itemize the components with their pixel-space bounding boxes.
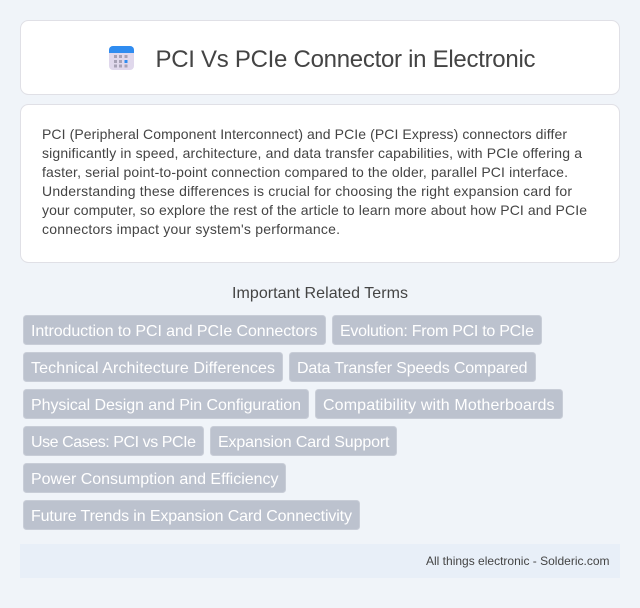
tag: speeds: Data Transfer Speeds Compared <box>297 360 528 377</box>
tag: compatibility: Compatibility with Motherboards <box>323 397 554 414</box>
tag: future trends: Future Trends in Expansion Card Connectivity <box>31 508 352 525</box>
tag: power <box>24 464 286 492</box>
footer credit: All things electronic - Solderic.com <box>426 554 610 568</box>
tag: expansion card: Expansion Card Support <box>218 434 390 451</box>
tag: speeds <box>290 352 536 382</box>
intro paragraph: PCI (Peripheral Component Interconnect) and PCIe (PCI Express) connectors differ <box>42 126 567 142</box>
tag: expansion card <box>210 426 396 456</box>
tag: architecture <box>24 352 282 382</box>
tag: introduction <box>24 316 326 344</box>
tag: future trends <box>24 500 360 530</box>
related terms tags <box>24 316 562 530</box>
tag: physical design: Physical Design and Pin Configuration <box>31 397 301 414</box>
tag: introduction: Introduction to PCI and PCIe Connectors <box>31 323 318 340</box>
icon: calendar grid <box>109 46 134 70</box>
header panel <box>20 20 620 94</box>
intro paragraph: significantly in speed, architecture, and data transfer capabilities, with PCIe offering a <box>42 145 582 161</box>
footer <box>20 544 620 578</box>
heading: related terms: Important Related Terms <box>232 285 408 302</box>
tag: evolution <box>332 316 542 344</box>
tag: architecture: Technical Architecture Differences <box>31 360 275 377</box>
title: PCI Vs PCIe Connector in Electronic <box>156 46 536 73</box>
intro paragraph: Understanding these differences is crucial for choosing the right expansion card for <box>42 183 572 199</box>
tag: evolution: Evolution: From PCI to PCIe <box>340 323 534 340</box>
intro paragraph: your computer, so explore the rest of the article to learn more about how PCI and PCIe <box>42 202 587 218</box>
tag: use cases: Use Cases: PCI vs PCIe <box>31 434 196 451</box>
tag: power: Power Consumption and Efficiency <box>31 471 278 488</box>
tag: compatibility <box>316 390 562 418</box>
intro paragraph <box>42 126 587 237</box>
tag: use cases <box>24 426 204 456</box>
panel: intro text <box>20 104 620 262</box>
intro paragraph: connectors impact your system's performance. <box>42 221 340 237</box>
tag: physical design <box>24 390 308 418</box>
intro paragraph: faster, serial point-to-point connection compared to the older, parallel PCI interface. <box>42 164 568 180</box>
